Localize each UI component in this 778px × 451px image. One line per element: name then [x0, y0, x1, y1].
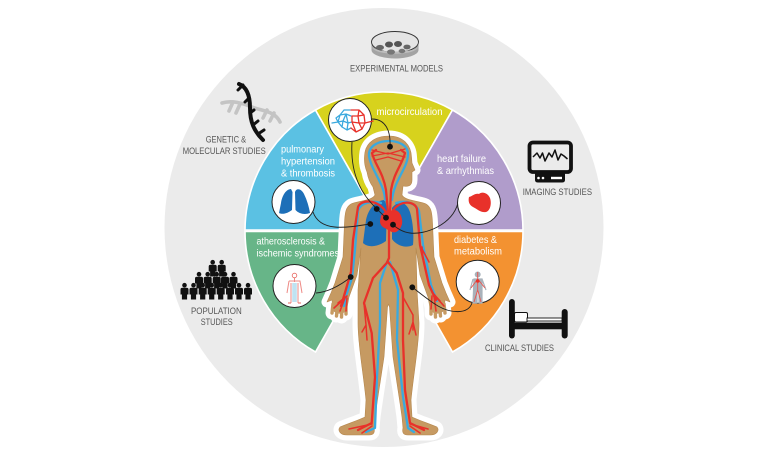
label: genetic and molecular studies	[183, 135, 266, 156]
icon: petri dish	[372, 32, 418, 58]
red arteries	[334, 149, 444, 433]
outer grey circle	[164, 8, 604, 447]
label: pulmonary: pulmonary	[281, 144, 325, 156]
label: and arrhythmias: & arrhythmias	[437, 166, 494, 177]
icon: microcirculation network	[328, 98, 373, 142]
connector lines	[313, 119, 472, 312]
label: atherosclerosis: atherosclerosis &	[256, 237, 325, 248]
icon: mini body with organs	[456, 260, 499, 303]
label: genetic and molecular studies: MOLECULAR STUDIES	[183, 146, 266, 156]
label: genetic and molecular studies: GENETIC &	[206, 135, 246, 145]
wedge: microcirculation	[316, 92, 452, 230]
wedge: atherosclerosis and ischemic syndromes	[245, 232, 384, 352]
label: diabetes: diabetes &	[454, 235, 497, 246]
icon: mini body with arteries	[273, 264, 316, 308]
blue veins	[344, 141, 437, 432]
icon: heart	[458, 182, 500, 224]
label: hypertension: hypertension	[281, 156, 335, 168]
wedge: heart failure and arrhythmias	[384, 110, 523, 230]
label: population studies	[191, 306, 242, 327]
body fill	[327, 136, 450, 435]
label: ischemic syndromes: ischemic syndromes	[256, 249, 339, 260]
label: population studies: POPULATION	[191, 306, 242, 316]
lungs inside body	[363, 200, 413, 247]
connector dots	[348, 144, 415, 290]
label: heart failure: heart failure	[437, 154, 486, 165]
wedge: pulmonary hypertension and thrombosis	[245, 110, 384, 230]
body white outline	[327, 136, 450, 435]
icon: hospital bed	[509, 299, 568, 338]
icon: crowd of people	[180, 260, 252, 300]
label: imaging studies: IMAGING STUDIES	[523, 187, 592, 197]
icon: lungs	[272, 180, 315, 224]
label: microcirculation: microcirculation	[376, 107, 442, 118]
label: clinical studies: CLINICAL STUDIES	[485, 343, 554, 353]
icon: DNA helix	[222, 84, 280, 140]
wedge: diabetes and metabolism	[384, 232, 523, 352]
label: and thrombosis: & thrombosis	[281, 168, 335, 180]
label: population studies: STUDIES	[201, 317, 233, 327]
human body with circulatory system	[327, 136, 450, 435]
label: experimental models: EXPERIMENTAL MODELS	[350, 64, 443, 74]
heart inside body	[380, 210, 402, 232]
icon: monitor	[530, 142, 571, 182]
label: metabolism: metabolism	[454, 247, 502, 258]
